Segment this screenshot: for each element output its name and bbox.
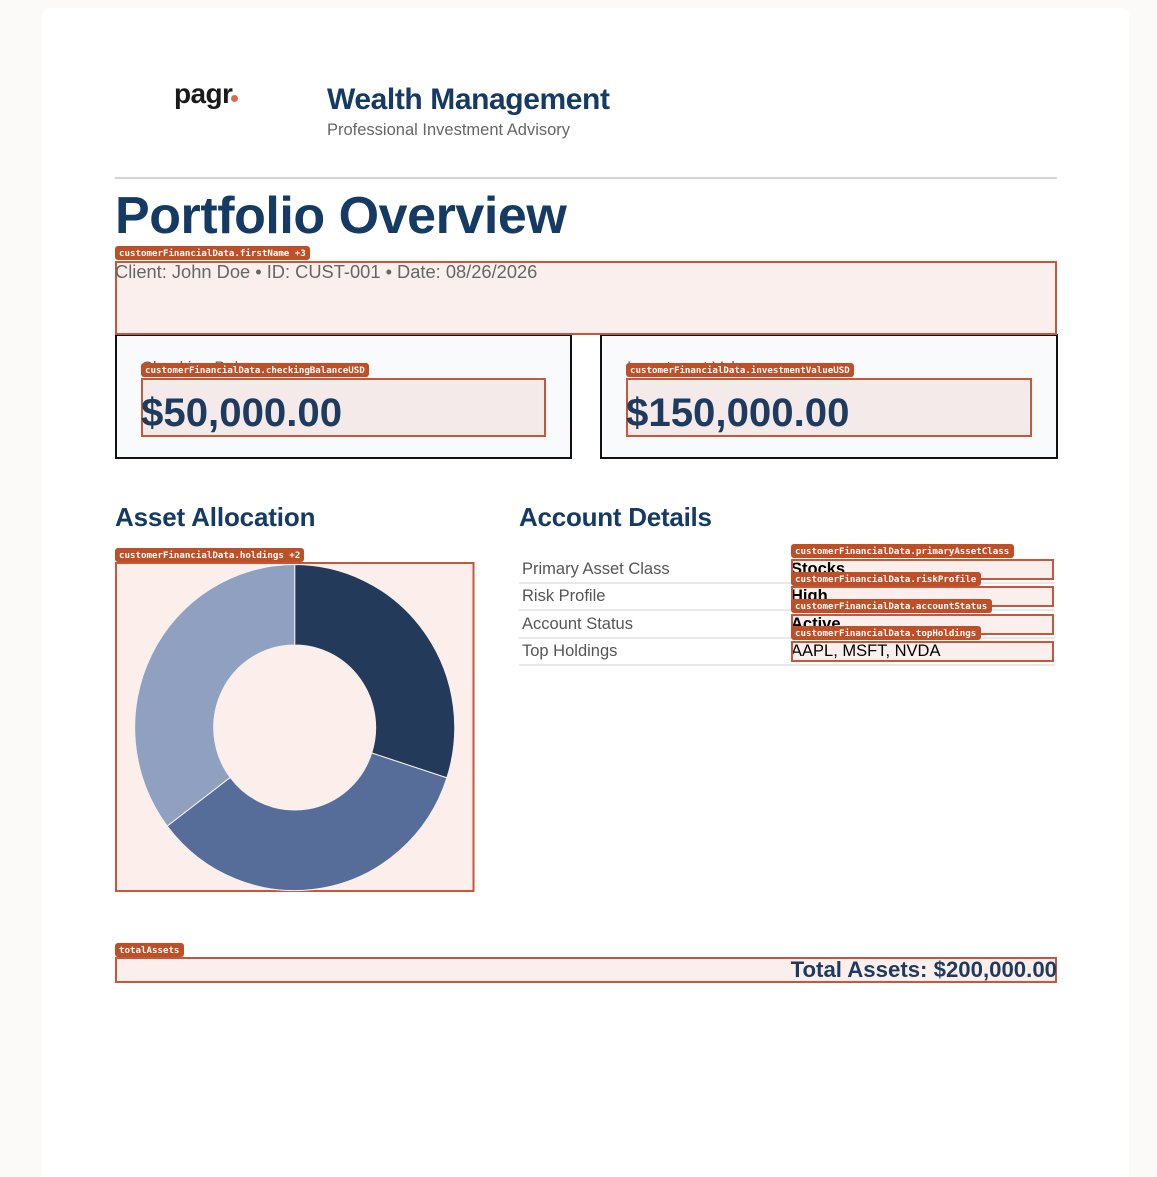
investment value field tag bbox=[626, 363, 854, 377]
holdings field tag bbox=[115, 548, 304, 562]
holdings field tag: customerFinancialData.holdings +2 bbox=[119, 551, 300, 561]
account details heading: Account Details bbox=[519, 502, 712, 532]
total assets tag bbox=[115, 943, 184, 957]
table label: primary asset class: Primary Asset Class bbox=[522, 560, 670, 578]
investment value field tag: customerFinancialData.investmentValueUSD bbox=[630, 366, 850, 376]
active text: Active bbox=[791, 615, 841, 633]
table label: account status: Account Status bbox=[522, 615, 633, 633]
total assets tag: totalAssets bbox=[119, 946, 179, 956]
title: Portfolio Overview bbox=[115, 187, 566, 245]
high text: High bbox=[791, 587, 828, 605]
checking balance value bbox=[141, 378, 546, 437]
checking balance field tag: customerFinancialData.checkingBalanceUSD bbox=[145, 366, 365, 376]
company name: Wealth Management bbox=[327, 83, 610, 116]
client info text: Client: John Doe • ID: CUST-001 • Date: 08/26/2026 bbox=[115, 261, 537, 282]
investment value amount: $150,000.00 bbox=[626, 390, 849, 435]
donut chart bbox=[115, 562, 474, 892]
risk profile tag: customerFinancialData.riskProfile bbox=[795, 575, 976, 585]
table label: risk profile: Risk Profile bbox=[522, 587, 605, 605]
risk profile value bbox=[791, 586, 1054, 607]
total assets text: Total Assets: $200,000.00 bbox=[791, 957, 1057, 982]
panel: investment value card bbox=[600, 334, 1058, 459]
client field tag: customerFinancialData.firstName +3 bbox=[119, 249, 306, 259]
holdings text: AAPL, MSFT, NVDA bbox=[791, 642, 940, 660]
stocks text: Stocks bbox=[791, 560, 845, 578]
primary asset class tag bbox=[791, 544, 1014, 558]
client info panel bbox=[115, 261, 1057, 335]
checking balance label: Checking Balance bbox=[141, 359, 274, 377]
primary asset class value bbox=[791, 559, 1054, 580]
table label: top holdings: Top Holdings bbox=[522, 642, 617, 660]
top holdings value bbox=[791, 641, 1054, 662]
top holdings tag bbox=[791, 626, 981, 640]
top holdings tag: customerFinancialData.topHoldings bbox=[795, 629, 976, 639]
checking balance amount: $50,000.00 bbox=[141, 390, 342, 435]
logo bbox=[174, 78, 238, 109]
risk profile tag bbox=[791, 572, 981, 586]
account status value bbox=[791, 614, 1054, 635]
company tagline: Professional Investment Advisory bbox=[327, 121, 570, 139]
asset allocation heading: Asset Allocation bbox=[115, 502, 315, 532]
investment value box bbox=[626, 378, 1032, 437]
primary asset class tag: customerFinancialData.primaryAssetClass bbox=[795, 547, 1009, 557]
account status tag: customerFinancialData.accountStatus bbox=[795, 602, 987, 612]
total assets bar bbox=[115, 957, 1057, 983]
client field tag bbox=[115, 246, 310, 260]
logo wordmark: pagr bbox=[174, 78, 232, 109]
panel: checking balance card bbox=[115, 334, 572, 459]
checking balance field tag bbox=[141, 363, 369, 377]
account status tag bbox=[791, 599, 992, 613]
logo dot bbox=[231, 94, 238, 102]
investment value label: Investment Value bbox=[627, 359, 753, 377]
